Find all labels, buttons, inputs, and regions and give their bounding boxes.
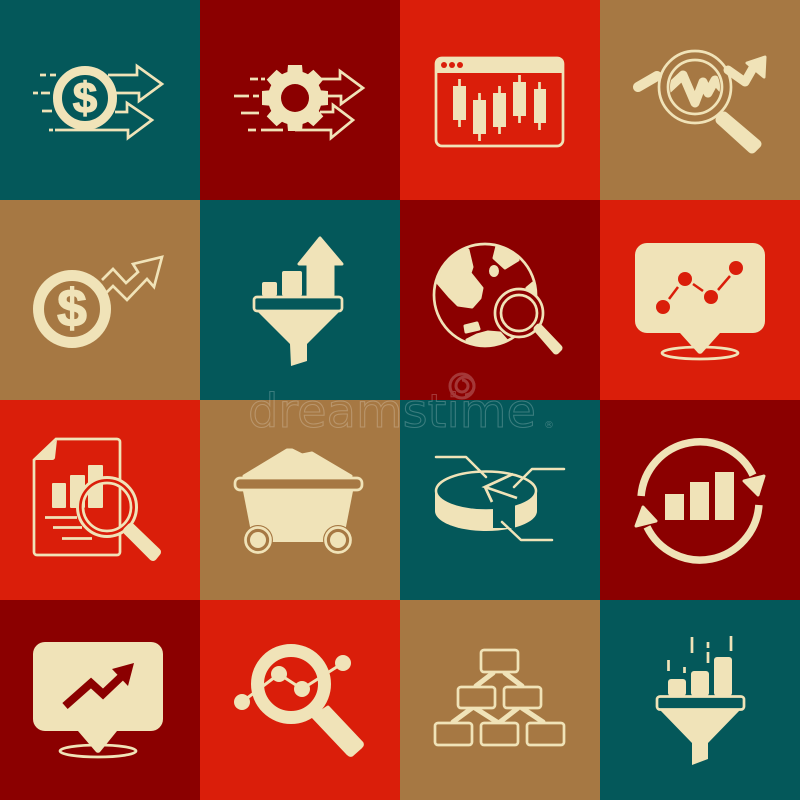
icon: connectors bbox=[453, 673, 543, 722]
panel: candlestick browser window bbox=[400, 0, 600, 200]
chart: pie disc bbox=[435, 472, 537, 531]
icon: globe bbox=[430, 244, 542, 352]
panel: mine cart bbox=[200, 400, 400, 600]
icon: trend line with arrow bbox=[638, 57, 765, 87]
icon: callout lines bbox=[436, 457, 564, 540]
icon: dollar coin: $ bbox=[57, 279, 87, 338]
icon: cycle arrows bbox=[636, 442, 764, 560]
panel: refresh cycle with bars bbox=[600, 400, 800, 600]
panel: hierarchy diagram bbox=[400, 600, 600, 800]
panel: gear with arrows bbox=[200, 0, 400, 200]
panel: funnel with growing bars bbox=[200, 200, 400, 400]
panel: globe search bbox=[400, 200, 600, 400]
icon: cart body bbox=[235, 478, 362, 542]
icon: location ring bbox=[60, 745, 136, 757]
icon: pile bbox=[244, 450, 351, 476]
icon: magnifier bbox=[659, 51, 757, 149]
watermark: ® bbox=[544, 420, 554, 431]
icon: browser window bbox=[435, 57, 564, 146]
icon: boxes bbox=[435, 650, 564, 745]
watermark: dreamstime bbox=[248, 384, 536, 438]
icon: left wheel bbox=[243, 525, 273, 555]
icon: dollar coin bbox=[58, 70, 112, 126]
icon: location ring bbox=[662, 347, 738, 359]
icon: dollar coin: $ bbox=[73, 74, 97, 123]
icon: speech bubble bbox=[33, 642, 163, 753]
icon: magnifier bbox=[78, 478, 157, 557]
icon: right wheel bbox=[323, 525, 353, 555]
panel: report with magnifier bbox=[0, 400, 200, 600]
icon: data ticks bbox=[668, 636, 731, 673]
icon: arrows bbox=[234, 71, 363, 138]
chart: bars bbox=[665, 472, 734, 520]
panel: data magnifier bbox=[200, 600, 400, 800]
icon: funnel bbox=[657, 696, 744, 765]
panel: dollar coin and growth arrow bbox=[0, 200, 200, 400]
chart: bars bbox=[52, 465, 103, 508]
panel: trend speech bubble bbox=[0, 600, 200, 800]
icon: arrows bbox=[33, 66, 162, 138]
icon: funnel bbox=[254, 297, 342, 366]
icon: dollar coin bbox=[38, 276, 106, 342]
panel: 3D pie chart bbox=[400, 400, 600, 600]
icon: data line bbox=[234, 655, 351, 710]
panel: chart speech bubble bbox=[600, 200, 800, 400]
icon: magnifier bbox=[258, 650, 362, 755]
panel: funnel with bars bbox=[600, 600, 800, 800]
panel: dollar coin with arrows bbox=[0, 0, 200, 200]
icon: growth arrow bbox=[102, 257, 162, 300]
chart: bars bbox=[668, 657, 732, 696]
chart: bars and arrow bbox=[262, 238, 342, 296]
icon: gear bbox=[262, 65, 328, 131]
icon: speech bubble bbox=[635, 243, 765, 354]
chart: candlesticks bbox=[453, 75, 546, 141]
icon: magnifier bbox=[495, 289, 559, 351]
icon: document bbox=[34, 439, 120, 555]
panel: magnifier on trend line bbox=[600, 0, 800, 200]
